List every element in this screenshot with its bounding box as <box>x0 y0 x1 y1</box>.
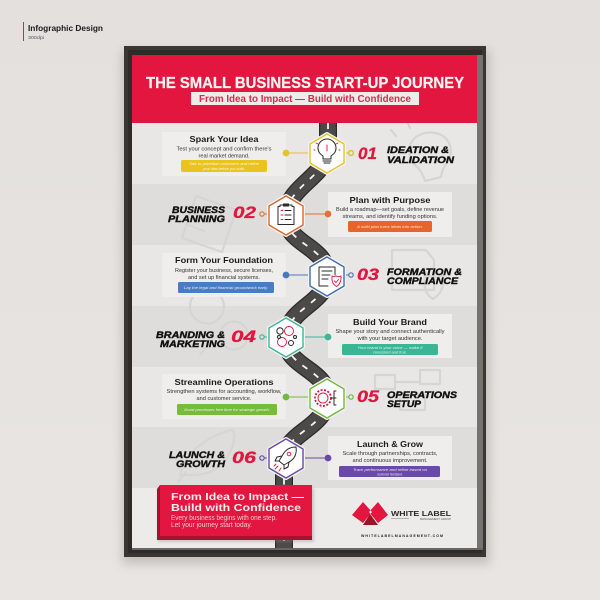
logo <box>352 502 451 538</box>
step 06 card: Launch & Grow <box>357 440 424 449</box>
step 04 label: BRANDING & <box>156 330 225 341</box>
callout: closing message: Build with Confidence <box>171 503 301 514</box>
step 05 connector <box>283 394 353 400</box>
step 06 card <box>328 436 452 480</box>
step 06 label: LAUNCH & <box>169 450 225 461</box>
step 01 label: VALIDATION <box>387 155 455 166</box>
step 03 label <box>387 267 462 287</box>
step 01 card: Talk to potential customers and refine <box>189 162 259 166</box>
step 02 card: Build a roadmap—set goals, define revenue <box>336 207 445 213</box>
step 05 label <box>387 390 458 410</box>
step 04 card: Build Your Brand <box>353 317 427 327</box>
step 02 card <box>328 192 452 237</box>
step 01 card: real market demand. <box>198 154 250 160</box>
step 05 label: OPERATIONS <box>387 390 458 401</box>
step 02 card: streams, and identify funding options. <box>342 214 438 220</box>
title: THE SMALL BUSINESS START-UP JOURNEY <box>146 75 465 92</box>
callout: closing message <box>157 485 314 542</box>
step 03 card: and set up financial systems. <box>188 275 260 281</box>
step 05 card <box>162 374 286 419</box>
step 01 card: your idea before you build. <box>202 167 245 171</box>
step 06 card: and continuous improvement. <box>352 458 428 464</box>
step 05 card: and customer service. <box>196 396 252 402</box>
step 02 card: Plan with Purpose <box>350 195 431 205</box>
step 04 card <box>328 314 452 358</box>
step 02 label: PLANNING <box>168 214 226 225</box>
step 04 connector <box>260 334 331 340</box>
step 04 label: MARKETING <box>160 339 226 350</box>
road <box>284 123 328 548</box>
step 01 label <box>387 145 455 166</box>
header note: Infographic Design <box>28 24 103 33</box>
step 01 card: Spark Your Idea <box>190 135 259 144</box>
step 01 label: IDEATION & <box>387 145 449 156</box>
step 05 card: Strengthen systems for accounting, workflow, <box>166 389 282 395</box>
header note: 300dpi <box>28 35 44 40</box>
step 06 number: 06 <box>232 449 257 467</box>
step 05 label: SETUP <box>387 399 422 410</box>
step 05 hexagon icon: gear workflow <box>310 379 344 418</box>
step 06 card: Scale through partnerships, contracts, <box>342 451 438 457</box>
step 03 hexagon icon: document shield <box>310 257 344 296</box>
watermark icons <box>178 121 451 482</box>
step 04 card: Shape your story and connect authentically <box>336 329 445 335</box>
subtitle ribbon: From Idea to Impact — Build with Confidence <box>199 94 412 105</box>
logo: WHITE LABEL <box>391 509 451 518</box>
step 06 card: Track performance and refine based on <box>353 468 427 472</box>
step 04 card: with your target audience. <box>357 336 423 342</box>
step 05 card: Streamline Operations <box>174 377 274 387</box>
alternating background bands <box>132 123 477 548</box>
step 02 card: A solid plan turns ideas into action. <box>356 225 423 229</box>
step 03 label: FORMATION & <box>387 267 462 278</box>
step 01 connector <box>283 150 353 156</box>
title banner <box>132 55 477 123</box>
step 01 hexagon icon: light bulb <box>310 134 344 173</box>
step 06 label <box>169 450 226 470</box>
step 04 label <box>156 330 226 350</box>
step 03 connector <box>283 272 353 278</box>
header note <box>23 22 103 41</box>
step 03 card <box>162 253 286 297</box>
step 02 number: 02 <box>233 204 256 222</box>
step 03 card: Form Your Foundation <box>175 255 273 265</box>
step 06 hexagon icon: rocket <box>269 439 303 478</box>
step 03 number: 03 <box>357 266 379 284</box>
step 01 card <box>162 132 286 176</box>
step 02 label: BUSINESS <box>172 205 226 216</box>
step 03 card: Lay the legal and financial groundwork early. <box>184 286 268 290</box>
step 04 number: 04 <box>231 328 256 346</box>
poster frame <box>124 46 486 557</box>
step 06 card: customer feedback. <box>377 472 403 476</box>
step 03 card: Register your business, secure licenses, <box>175 268 273 274</box>
step 01 card: Test your concept and confirm there's <box>176 146 272 152</box>
step 05 number: 05 <box>357 388 380 406</box>
step 05 card: Good processes free time for strategic growth. <box>184 408 270 412</box>
step 06 label: GROWTH <box>176 459 226 470</box>
step 04 card: Your brand is your voice — make it <box>358 346 424 350</box>
logo: WHITELABELMANAGEMENT.COM <box>361 534 443 538</box>
step 03 label: COMPLIANCE <box>387 276 459 287</box>
step 02 label <box>168 205 226 225</box>
step 04 hexagon icon: brand network <box>269 318 303 357</box>
callout: closing message: Let your journey start today. <box>171 522 252 529</box>
step 06 connector <box>260 455 331 461</box>
step 02 hexagon icon: clipboard <box>269 196 303 235</box>
step 04 card: consistent and true. <box>373 350 407 354</box>
step 01 number: 01 <box>358 145 377 163</box>
step 02 connector <box>260 211 331 217</box>
callout: closing message: Every business begins with one step. <box>171 515 277 522</box>
logo: MANAGEMENT GROUP <box>420 517 451 521</box>
callout: closing message: From Idea to Impact — <box>171 492 305 503</box>
